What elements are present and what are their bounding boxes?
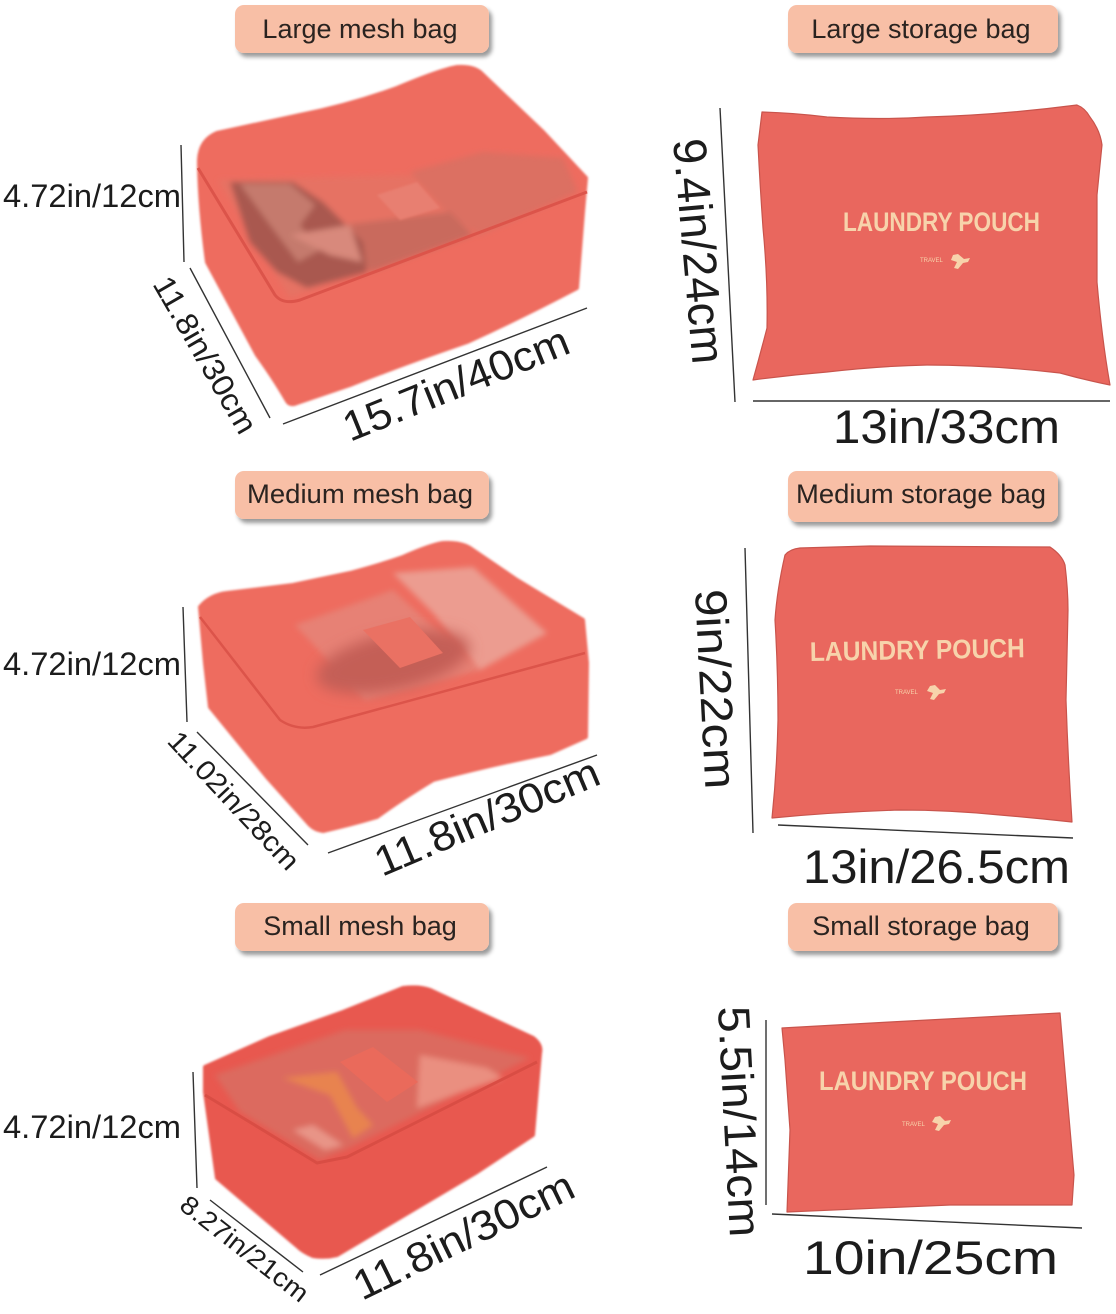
label: large mesh bag bbox=[235, 5, 489, 53]
large storage pouch: LAUNDRY POUCH bbox=[843, 207, 1040, 237]
dimension: small mesh bbox=[3, 1109, 582, 1309]
dimension: large mesh: 11.8in/30cm bbox=[146, 270, 264, 440]
small storage pouch bbox=[782, 1013, 1074, 1212]
large storage pouch bbox=[753, 105, 1110, 385]
medium storage pouch bbox=[772, 546, 1072, 822]
dimension: large mesh: 4.72in/12cm bbox=[3, 178, 181, 214]
luggage tag bbox=[363, 617, 443, 668]
dimension: large storage: 9.4in/24cm bbox=[663, 136, 736, 366]
dimension: small storage: 10in/25cm bbox=[803, 1231, 1058, 1284]
dimension: medium mesh: 11.02in/28cm bbox=[162, 725, 306, 876]
small mesh bag illustration bbox=[205, 987, 540, 1257]
label: large storage bag: Large storage bag bbox=[811, 14, 1031, 44]
dimension: small storage: 5.5in/14cm bbox=[708, 1005, 771, 1238]
label: small storage bag: Small storage bag bbox=[812, 911, 1030, 941]
medium mesh bag illustration bbox=[200, 543, 587, 831]
luggage tag bbox=[340, 1047, 418, 1102]
label: large storage bag bbox=[788, 5, 1058, 53]
dimension: medium storage: 13in/26.5cm bbox=[803, 840, 1070, 893]
dimension: small storage bbox=[708, 1005, 1058, 1284]
dimension: large mesh: 15.7in/40cm bbox=[336, 317, 576, 450]
label: small storage bag bbox=[788, 903, 1058, 951]
dimension: medium mesh: 4.72in/12cm bbox=[3, 646, 181, 682]
label: medium storage bag bbox=[788, 471, 1058, 522]
label: medium mesh bag: Medium mesh bag bbox=[247, 479, 473, 509]
luggage tag bbox=[377, 182, 440, 220]
label: medium storage bag: Medium storage bag bbox=[796, 479, 1046, 509]
dimension: medium storage: 9in/22cm bbox=[685, 588, 746, 790]
label: large mesh bag: Large mesh bag bbox=[262, 14, 458, 44]
dimension: large mesh bbox=[3, 178, 576, 450]
label: small mesh bag bbox=[235, 903, 489, 951]
dimension: small mesh: 4.72in/12cm bbox=[3, 1109, 181, 1145]
label: medium mesh bag bbox=[235, 471, 489, 519]
dimension: medium mesh bbox=[3, 646, 606, 885]
dimension: large storage: 13in/33cm bbox=[833, 400, 1060, 453]
medium storage pouch: LAUNDRY POUCH bbox=[810, 633, 1025, 667]
dimension lines bbox=[181, 108, 1110, 1275]
small storage pouch: LAUNDRY POUCH bbox=[819, 1066, 1027, 1096]
label: small mesh bag: Small mesh bag bbox=[263, 911, 457, 941]
dimension: medium mesh: 11.8in/30cm bbox=[367, 748, 606, 885]
large storage pouch: TRAVEL bbox=[920, 258, 944, 264]
dimension: large storage bbox=[663, 136, 1060, 453]
dimension: medium storage bbox=[685, 588, 1070, 893]
dimension: small mesh: 8.27in/21cm bbox=[174, 1189, 315, 1308]
large mesh bag illustration bbox=[198, 67, 587, 404]
small storage pouch: TRAVEL bbox=[902, 1122, 926, 1128]
dimension: small mesh: 11.8in/30cm bbox=[345, 1162, 582, 1309]
medium storage pouch: TRAVEL bbox=[895, 690, 919, 696]
